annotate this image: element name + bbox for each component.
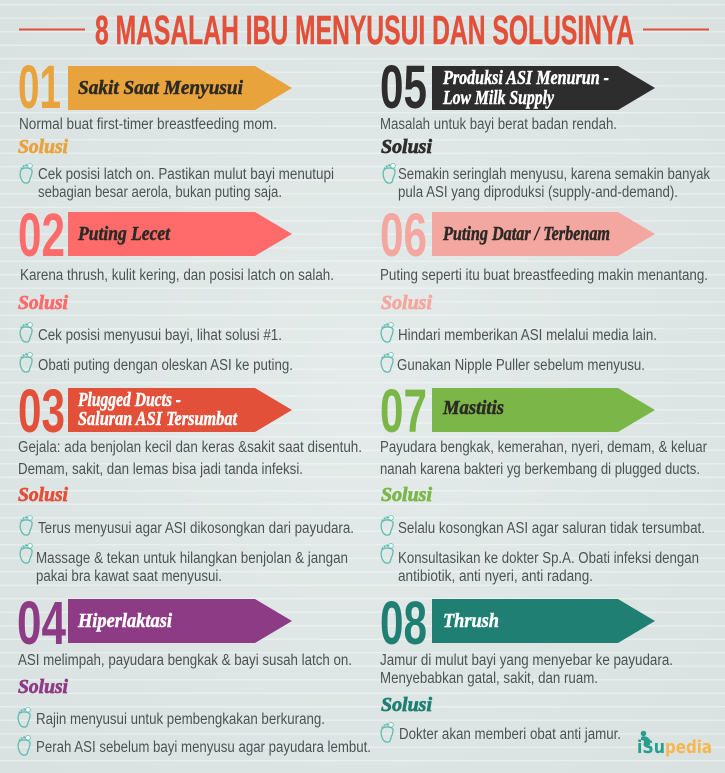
panel: problem 02 — [18, 201, 334, 374]
description — [380, 652, 673, 687]
number 08: 08 — [380, 589, 427, 657]
solusi heading: Solusi — [381, 136, 432, 158]
banner: Thrush — [432, 599, 655, 643]
panel: problem 03 — [18, 377, 362, 585]
logo: iSupedia: iSu — [637, 737, 665, 758]
icon: foot — [20, 516, 32, 535]
solution text: Hindari memberikan ASI melalui media lain. — [398, 327, 657, 344]
banner: Plugged Ducts: Saluran ASI Tersumbat — [78, 408, 238, 430]
icon: foot — [381, 352, 393, 372]
panel: problem 06 — [380, 201, 708, 374]
icon: foot — [20, 322, 32, 342]
description: Masalah untuk bayi berat badan rendah. — [380, 116, 617, 133]
solution text: Dokter akan memberi obat anti jamur. — [399, 726, 621, 743]
icon: foot — [20, 164, 32, 183]
banner: Produksi ASI Menurun: Low Milk Supply — [442, 87, 554, 109]
description: Demam, sakit, dan lemas bisa jadi tanda infeksi. — [18, 461, 303, 478]
icon: foot — [18, 708, 30, 727]
banner: Puting Datar / Terbenam: Puting Datar / Terbenam — [442, 223, 610, 245]
banner: Thrush: Thrush — [443, 610, 499, 632]
number 05: 05 — [380, 53, 427, 121]
icon: foot — [381, 322, 393, 342]
panel: problem 07 — [380, 377, 707, 585]
logo: iSupedia — [637, 731, 712, 758]
solusi heading: Solusi — [18, 136, 68, 158]
number 06: 06 — [380, 201, 427, 269]
description: Gejala: ada benjolan kecil dan keras &sakit saat disentuh. — [18, 439, 362, 456]
number 03: 03 — [18, 377, 65, 445]
solution text — [398, 550, 699, 585]
icon: foot — [381, 722, 393, 742]
number 01: 01 — [18, 53, 61, 121]
banner: Mastitis: Mastitis — [442, 397, 504, 419]
solution text — [398, 166, 710, 201]
banner: Produksi ASI Menurun — [432, 66, 655, 110]
solusi heading: Solusi — [381, 292, 432, 314]
banner: Sakit Saat Menyusui — [68, 66, 292, 110]
solusi heading: Solusi — [18, 292, 68, 314]
solution text: pakai bra kawat saat menyusui. — [36, 568, 222, 585]
solution text: Massage & tekan untuk hilangkan benjolan & jangan — [36, 550, 348, 567]
description: Jamur di mulut bayi yang menyebar ke payudara. — [380, 652, 673, 669]
banner: Mastitis — [432, 388, 655, 432]
description: Karena thrush, kulit kering, dan posisi latch on salah. — [20, 267, 334, 284]
logo: iSupedia: pedia — [665, 737, 712, 758]
banner: Plugged Ducts: Plugged Ducts - — [77, 389, 181, 411]
solution text: sebagian besar aerola, bukan puting saja. — [38, 184, 282, 201]
solution text: pula ASI yang diproduksi (supply-and-demand). — [398, 184, 678, 201]
solution text: Rajin menyusui untuk pembengkakan berkurang. — [36, 711, 325, 728]
panel: problem 05 — [380, 53, 710, 201]
solution text: Terus menyusui agar ASI dikosongkan dari payudara. — [38, 520, 354, 537]
banner: Produksi ASI Menurun: Produksi ASI Menurun - — [442, 67, 609, 89]
solusi heading: Solusi — [381, 694, 432, 716]
solusi heading: Solusi — [18, 484, 68, 506]
solusi heading: Solusi — [381, 484, 432, 506]
number 04: 04 — [17, 589, 66, 657]
solution text: Perah ASI sebelum bayi menyusu agar payudara lembut. — [36, 739, 371, 756]
icon: foot — [20, 544, 32, 563]
description: Menyebabkan gatal, sakit, dan ruam. — [380, 670, 598, 687]
solution text — [36, 550, 348, 585]
number 02: 02 — [18, 201, 65, 269]
solution text: Cek posisi latch on. Pastikan mulut bayi menutupi — [38, 166, 334, 183]
panel: problem 08 — [380, 589, 673, 743]
banner: Hiperlaktasi — [68, 599, 292, 643]
icon: foot — [20, 352, 32, 372]
solusi heading: Solusi — [18, 676, 68, 698]
icon: foot — [381, 516, 393, 535]
icon: foot — [381, 544, 393, 563]
description — [380, 439, 707, 478]
description: Normal buat first-timer breastfeeding mom. — [19, 116, 277, 133]
panel: problem 01 — [18, 53, 334, 201]
icon: foot — [383, 164, 395, 183]
banner: Plugged Ducts — [68, 388, 292, 432]
banner: Hiperlaktasi: Hiperlaktasi — [77, 610, 172, 632]
banner: Puting Lecet — [68, 212, 292, 256]
panel: problem 04 — [17, 589, 371, 756]
solution text: Obati puting dengan oleskan ASI ke puting. — [38, 357, 293, 374]
solution text: Cek posisi menyusui bayi, lihat solusi #1. — [38, 327, 282, 344]
icon: foot — [18, 736, 30, 755]
solution text — [38, 166, 334, 201]
banner: Puting Lecet: Puting Lecet — [77, 223, 171, 245]
description — [18, 439, 362, 478]
description: ASI melimpah, payudara bengkak & bayi susah latch on. — [18, 652, 352, 669]
number 07: 07 — [380, 377, 427, 445]
solution text: Gunakan Nipple Puller sebelum menyusu. — [397, 357, 645, 374]
banner: Puting Datar / Terbenam — [432, 212, 655, 256]
banner: Sakit Saat Menyusui: Sakit Saat Menyusui — [78, 77, 243, 99]
solution text: antibiotik, anti nyeri, anti radang. — [398, 568, 593, 585]
